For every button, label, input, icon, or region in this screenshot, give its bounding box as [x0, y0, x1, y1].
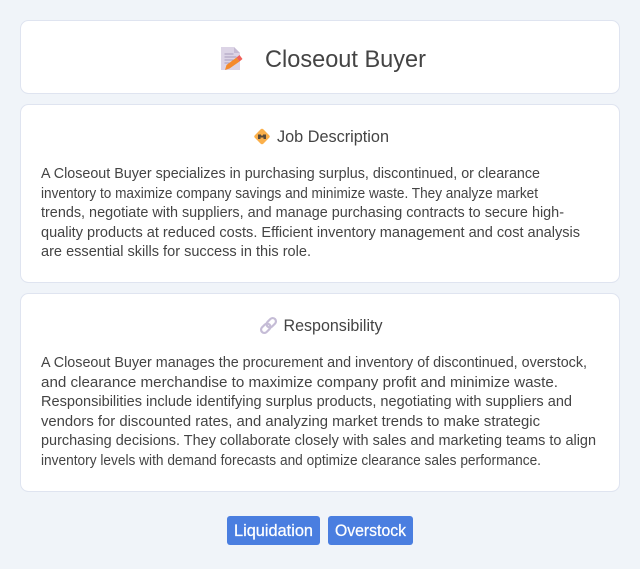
tag: Liquidation	[227, 516, 320, 545]
text block: job description: A Closeout Buyer specializes in purchasing surplus, discontinued, or clearance	[41, 166, 540, 182]
tag: Overstock: Overstock	[335, 522, 407, 540]
text block: job description: trends, negotiate with suppliers, and manage purchasing contracts to secure high-	[41, 205, 564, 221]
panel: job description	[20, 104, 620, 282]
icon: diamond sign	[254, 128, 270, 145]
text block: job description: inventory to maximize company savings and minimize waste. They analyze market	[41, 186, 538, 202]
text block: responsibility: A Closeout Buyer manages the procurement and inventory of discontinued, overstock,	[41, 355, 587, 371]
heading: Job Description: Job Description	[277, 128, 389, 146]
tag: Overstock	[328, 516, 413, 545]
text block: responsibility: vendors for discounted rates, and analyzing market trends to make strategic	[41, 414, 540, 430]
icon: link	[260, 317, 277, 334]
text block: job description: quality products at reduced costs. Efficient inventory management and cost analysis	[41, 225, 580, 241]
text block: responsibility: inventory levels with demand forecasts and optimize clearance sales performance.	[41, 453, 541, 469]
text block: responsibility: Responsibilities include identifying surplus products, negotiating with suppliers and	[41, 394, 572, 410]
text block: job description	[41, 166, 580, 260]
icon: document with pencil	[221, 47, 242, 70]
tag: Liquidation: Liquidation	[234, 522, 313, 540]
text block: job description: are essential skills for success in this role.	[41, 244, 311, 260]
heading: Closeout Buyer: Closeout Buyer	[265, 46, 426, 73]
heading: Responsibility: Responsibility	[284, 317, 383, 335]
panel: responsibility	[20, 294, 620, 492]
text block: responsibility: purchasing decisions. They collaborate closely with sales and marketing teams to align	[41, 433, 596, 449]
text block: responsibility	[41, 355, 596, 469]
text block: responsibility: and clearance merchandise to maximize company profit and minimize waste.	[41, 375, 558, 391]
panel: title	[20, 20, 620, 94]
